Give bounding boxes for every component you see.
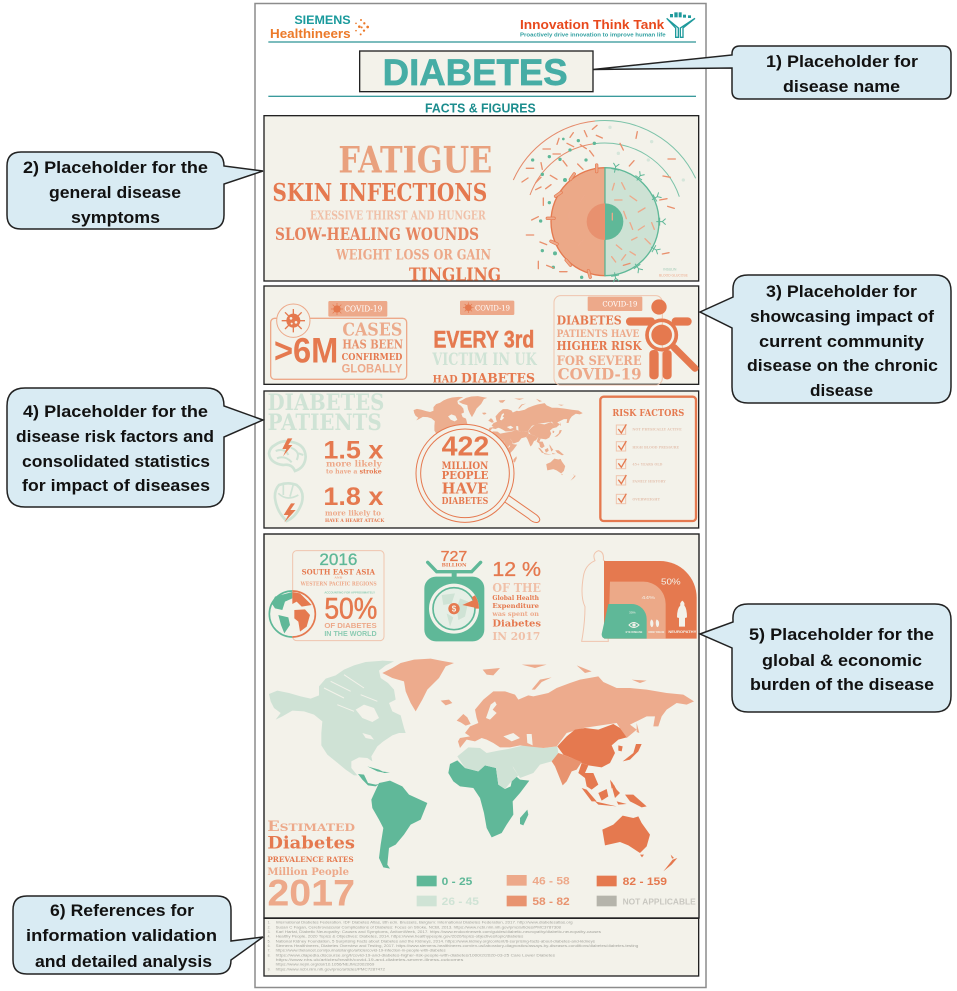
callout 6: references xyxy=(13,896,263,974)
stat: 727 billion scale xyxy=(424,549,542,643)
map legend: NOT APPLICABLE xyxy=(623,896,696,906)
stat: 50% in South East Asia: 2016 xyxy=(319,550,357,569)
logo: Siemens Healthineers xyxy=(270,13,369,41)
map title: estimated prevalence: 2017 xyxy=(267,872,355,914)
symptom word list: EXESSIVE THIRST AND HUNGER xyxy=(310,208,486,222)
icon: cell with insulin and glucose: INSULIN xyxy=(663,267,677,271)
stat: higher risk for severe COVID-19: FOR SEVERE xyxy=(557,353,642,368)
symptom word list: SLOW-HEALING WOUNDS xyxy=(275,225,479,244)
map title: estimated prevalence: Million People xyxy=(267,866,349,878)
stat: 1.8x heart attack: HAVE A HEART ATTACK xyxy=(325,518,385,524)
logo: Siemens Healthineers: SIEMENS xyxy=(294,13,351,27)
callout 1: disease name: 1) Placeholder for xyxy=(766,52,918,71)
icon: brain with lightning xyxy=(269,438,306,471)
panel: references: 4. xyxy=(268,935,271,939)
chart: complications silhouette: 50% xyxy=(661,576,681,586)
callout 4: risk factors: consolidated statistics xyxy=(22,452,210,471)
panel: references: https://www.ncbi.nlm.nih.gov/pmc/articles/PMC7287472 xyxy=(276,968,385,972)
map legend: 26 - 45 xyxy=(442,896,479,908)
logo: Siemens Healthineers: Healthineers xyxy=(270,26,351,41)
panel: references: 2. xyxy=(268,925,271,929)
chart: complications silhouette: NEUROPATHY xyxy=(668,630,697,634)
panel: references: Healthy People, 2020 Topics & Objectives: Diabetes, 2014. https://www.healthypeople.gov/2020/topics-objectives/topic/diabetes xyxy=(276,935,524,939)
stat: higher risk for severe COVID-19: COVID-19 xyxy=(558,364,642,383)
callout 2: general symptoms: symptoms xyxy=(71,208,160,227)
stat: higher risk for severe COVID-19: HIGHER RISK xyxy=(557,339,642,353)
callout 3: community disease impact xyxy=(700,275,951,403)
chart: complications silhouette: 44% xyxy=(642,595,656,601)
stat: 1.8x heart attack: 1.8 x xyxy=(323,483,383,511)
callout 3: community disease impact: 3) Placeholder for xyxy=(766,282,917,301)
stat: 727 billion scale: was spent on xyxy=(491,611,539,618)
stat: 727 billion scale: OF THE xyxy=(492,581,541,595)
risk factors box xyxy=(600,397,696,521)
stat: higher risk for severe COVID-19 xyxy=(554,296,695,385)
callout 3: community disease impact: current community xyxy=(759,332,925,351)
title box: disease name: DIABETES xyxy=(383,51,568,93)
callout 5: global burden xyxy=(700,604,951,712)
symptom word list: WEIGHT LOSS OR GAIN xyxy=(335,247,491,263)
small world map xyxy=(414,396,583,481)
symptom word list: TINGLING xyxy=(409,264,501,285)
icon: person with magnifier xyxy=(626,299,695,379)
callout 6: references: 6) References for xyxy=(50,901,194,920)
badge: COVID-19 xyxy=(460,301,514,315)
callout 5: global burden: burden of the disease xyxy=(750,675,934,694)
stat: over 6M cases: CASES xyxy=(342,321,402,341)
map title: estimated prevalence xyxy=(267,819,355,914)
panel: COVID-19 impact xyxy=(264,286,699,386)
magnifier: 422 million people: HAVE xyxy=(442,479,488,497)
callout 3: community disease impact: disease on the chronic xyxy=(747,356,938,375)
panel: references: 7. xyxy=(268,949,271,953)
map legend xyxy=(417,875,696,908)
stat: 50% in South East Asia xyxy=(293,550,384,641)
stat: 50% in South East Asia: AND xyxy=(333,576,343,580)
badge: COVID-19: COVID-19 xyxy=(475,303,510,312)
stat: 727 billion scale: Diabetes xyxy=(492,619,542,630)
symptom word list xyxy=(272,139,501,285)
stat: 50% in South East Asia: ACCOUNTING FOR APPROXIMATELY xyxy=(324,591,375,595)
stat: higher risk for severe COVID-19: PATIENTS HAVE xyxy=(557,329,640,340)
panel: references xyxy=(264,918,699,976)
callout 5: global burden: 5) Placeholder for the xyxy=(749,625,934,644)
stat: 727 billion scale: IN 2017 xyxy=(492,629,540,643)
stat: 727 billion scale: BILLION xyxy=(442,563,467,569)
world map section xyxy=(264,659,699,976)
panel: references: Karl Hartat, Diabetic Neuropathy: Causes and Symptoms, AnitomWeek, 2017. https://www.endocrineweb.com/guides/diabetic-neuropathy/diabetic-neuropathy-causes xyxy=(276,930,601,934)
callout 4: risk factors: for impact of diseases xyxy=(22,476,210,495)
checklist: OVERWEIGHT xyxy=(632,497,661,501)
logo: Innovation Think Tank: Proactively drive innovation to improve human life xyxy=(520,33,666,39)
callout 2: general symptoms: general disease xyxy=(49,183,181,202)
stat: 50% in South East Asia: OF DIABETES xyxy=(324,621,377,630)
checklist xyxy=(616,424,682,504)
chart: complications silhouette: KIDNEY DISEASE xyxy=(648,631,665,634)
panel: references: Susan C Fagan, Cerebrovascular Complications of Diabetes: Focus on Stroke, NCBI, 2013. https://www.ncbi.nlm.nih.gov/pmc/articles/PMC3787308 xyxy=(276,925,561,929)
title rule xyxy=(268,96,696,97)
stat: 727 billion scale: 12 % xyxy=(492,558,541,581)
stat: 50% in South East Asia: WESTERN PACIFIC REGIONS xyxy=(300,582,377,588)
panel background: global and economic burden xyxy=(264,534,699,918)
panel: references: 3. xyxy=(268,930,271,934)
callout 1: disease name xyxy=(593,46,951,99)
stat: 1.5x stroke xyxy=(323,436,383,476)
badge: COVID-19: COVID-19 xyxy=(344,304,382,314)
panel: references: 1. xyxy=(268,921,271,925)
checklist: HIGH BLOOD PRESSURE xyxy=(632,445,679,449)
panel: disease symptoms xyxy=(264,116,699,285)
subtitle: facts and figures: FACTS & FIGURES xyxy=(425,101,536,115)
stat: every 3rd victim: VICTIM IN UK xyxy=(432,349,537,369)
icon: globe half green half orange xyxy=(269,591,315,637)
callout 6: references: information validation xyxy=(26,926,217,945)
logo: Innovation Think Tank: Innovation Think Tank xyxy=(520,17,665,32)
callout 4: risk factors: 4) Placeholder for the xyxy=(23,402,208,421)
callout 6: references: and detailed analysis xyxy=(35,952,212,971)
stat: every 3rd victim xyxy=(432,327,537,386)
stat: 1.5x stroke: to have a stroke xyxy=(326,469,382,476)
map title: estimated prevalence: PREVALENCE RATES xyxy=(267,855,354,864)
callout 2: general symptoms: 2) Placeholder for the xyxy=(23,158,208,177)
callout 3: community disease impact: showcasing impact of xyxy=(750,307,934,326)
stat: 1.8x heart attack: more likely to xyxy=(325,509,381,518)
panel: references: 6. xyxy=(268,944,271,948)
panel: references: Siemens Healthineers, Diabetes Overview and Testing, 2017. https://www.siemens-healthineers.com/en-us/laboratory-diagnostics/assays-by-diseases-conditions/diabetes/diabetes-testing xyxy=(276,944,639,948)
icon: scale: $ xyxy=(452,605,457,614)
heading: diabetes patients: DIABETES xyxy=(268,390,384,416)
map legend: 82 - 159 xyxy=(623,876,667,888)
panel: references: https://www.nhs.uk/articles/health/covid-19-and-diabetes-severe-illness-outcomes xyxy=(276,958,464,962)
icon: virus xyxy=(277,304,310,337)
stat: 727 billion scale: 727 xyxy=(441,549,467,565)
map legend: 0 - 25 xyxy=(442,876,472,888)
stat: 727 billion scale: Expenditure xyxy=(492,602,539,610)
map legend: 58 - 82 xyxy=(532,896,570,908)
panel: references: 5. xyxy=(268,939,271,943)
stat: over 6M cases: >6M xyxy=(274,331,338,370)
panel: references: 8. xyxy=(268,953,271,957)
stat: 1.5x stroke: more likely xyxy=(326,459,383,469)
checklist: FAMILY HISTORY xyxy=(632,479,666,483)
stat: over 6M cases: GLOBALLY xyxy=(342,362,403,375)
map legend: 46 - 58 xyxy=(532,875,570,887)
panel: references: National Kidney Foundation, 5 Surprising Facts about Diabetes and the Kidneys, 2014. https://www.kidney.org/content/6-surprising-facts-about-diabetes-and-kidneys xyxy=(276,939,595,943)
map title: estimated prevalence: Diabetes xyxy=(267,832,355,852)
magnifier: 422 million people: 422 xyxy=(442,431,489,462)
risk factors box: RISK FACTORS xyxy=(612,409,684,419)
header and symptoms panel xyxy=(264,12,699,285)
stat: higher risk for severe COVID-19: DIABETES xyxy=(557,313,622,327)
icon: heart with lightning xyxy=(275,483,303,522)
badge: COVID-19 xyxy=(328,301,387,317)
callout 3: community disease impact: disease xyxy=(810,381,873,400)
chart: complications silhouette xyxy=(582,551,697,641)
magnifier: 422 million people: DIABETES xyxy=(442,497,488,507)
panel: references: https://www.thelancet.com/journals/langlo/article/covid-19-infection-in-people-with-diabetes xyxy=(276,949,446,953)
callout 5: global burden: global & economic xyxy=(762,651,922,670)
callout 4: risk factors xyxy=(7,388,263,507)
magnifier: 422 million people: PEOPLE xyxy=(442,468,489,482)
magnifier: 422 million people: MILLION xyxy=(442,459,489,472)
choropleth world map xyxy=(269,659,694,871)
heading: diabetes patients xyxy=(268,390,384,436)
panel: references: https://www.nejm.org/doi/10.1056/NEJMc2002069 xyxy=(276,963,375,967)
checklist: NOT PHYSICALLY ACTIVE xyxy=(632,428,682,432)
heading: diabetes patients: PATIENTS xyxy=(268,410,382,436)
stat: over 6M cases xyxy=(271,304,407,379)
magnifier: 422 million people xyxy=(416,424,540,522)
stat: higher risk for severe COVID-19: COVID-19 xyxy=(602,299,637,308)
symptom word list: SKIN INFECTIONS xyxy=(272,178,487,207)
logo: Innovation Think Tank xyxy=(520,12,695,39)
stat: 50% in South East Asia: 50% xyxy=(324,592,377,625)
callout 1: disease name: disease name xyxy=(783,77,900,96)
callout 4: risk factors: disease risk factors and xyxy=(16,427,214,446)
stat: 727 billion scale: Global Health xyxy=(492,594,539,602)
stat: 50% in South East Asia: IN THE WORLD xyxy=(324,629,377,638)
stat: over 6M cases: CONFIRMED xyxy=(342,352,402,363)
stat: 50% in South East Asia: SOUTH EAST ASIA xyxy=(302,567,375,576)
checklist: 45+ YEARS OLD xyxy=(632,463,662,467)
panel: references: https://www.diapedia.discourse.org/t/covid-19-and-diabetes-higher-risk-people-with-diabetes/1000/2/2020-03-25 Care Lower Diabetes xyxy=(276,953,555,957)
symptom word list: FATIGUE xyxy=(338,139,492,182)
chart: complications silhouette: EYE DISEASE xyxy=(626,631,643,634)
stat: every 3rd victim: EVERY 3rd xyxy=(433,327,534,354)
stat: every 3rd victim: HAD DIABETES xyxy=(433,370,535,386)
stat: 1.5x stroke: 1.5 x xyxy=(323,436,383,464)
panel: references: 9. xyxy=(268,968,271,972)
page frame xyxy=(255,4,706,988)
stat: 1.8x heart attack xyxy=(323,483,385,524)
icon: cell with insulin and glucose xyxy=(513,121,696,282)
icon: cell with insulin and glucose: BLOOD GLUCOSE xyxy=(659,273,689,277)
panel: references: International Diabetes Federation. IDF Diabetes Atlas, 8th edn. Brussels, Belgium: International Diabetes Federation, 2017. http://www.diabetesatlas.org xyxy=(276,921,573,925)
map title: estimated prevalence: ESTIMATED xyxy=(267,819,355,835)
callout 2: general symptoms xyxy=(7,152,263,229)
header rule xyxy=(268,41,696,43)
panel: risk factors and statistics xyxy=(264,390,699,528)
stat: over 6M cases: HAS BEEN xyxy=(342,337,403,351)
panels: COVID-19 impact and risk factors xyxy=(264,286,699,528)
chart: complications silhouette: 35% xyxy=(629,611,636,615)
economic burden row xyxy=(269,549,697,643)
